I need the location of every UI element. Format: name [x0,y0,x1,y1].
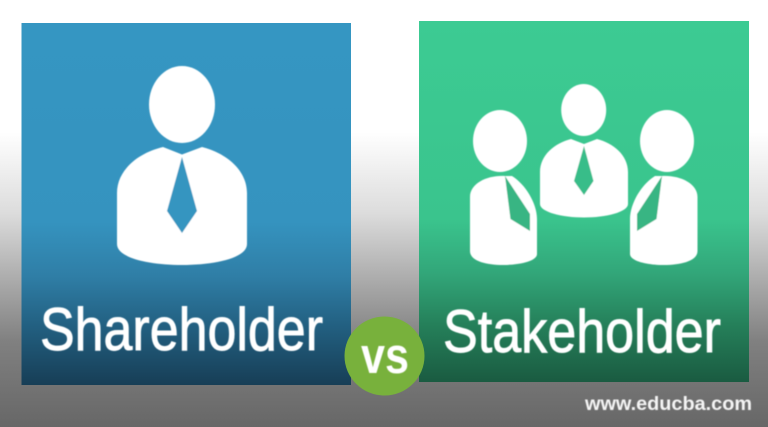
panel: shareholder [22,23,351,385]
website url: www.educba.com [584,394,752,415]
heading: Shareholder: Shareholder [40,296,323,363]
icon: single person with tie [117,66,247,265]
icon: right person [630,110,698,265]
badge: vs [344,316,424,396]
icon: left person [470,110,537,265]
badge: vs: vs [361,327,409,384]
icon: three people with ties [470,84,698,265]
icon: centre person [540,84,628,218]
panel: stakeholder [419,21,749,382]
heading: Stakeholder: Stakeholder [443,298,721,365]
